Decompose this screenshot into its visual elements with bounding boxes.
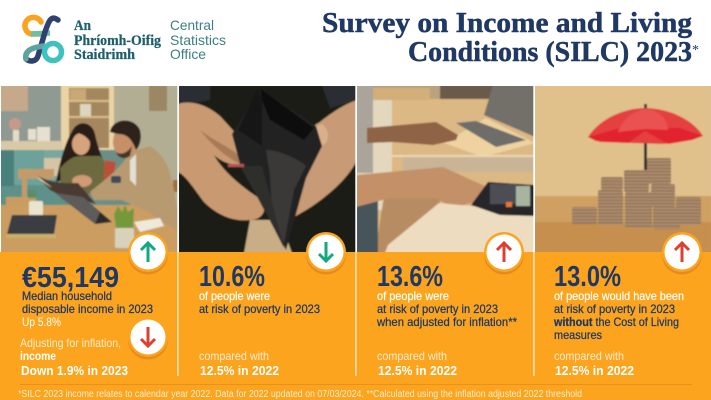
title: * xyxy=(692,43,699,58)
photo: empty wallet in hands xyxy=(178,85,357,253)
text: of people would have been: of people would have been xyxy=(554,289,684,303)
text: at risk of poverty: at risk of poverty in 2023 xyxy=(199,302,320,316)
panel: at risk of poverty xyxy=(199,261,320,378)
logo xyxy=(25,17,226,63)
text: at risk when adjusted xyxy=(376,302,517,329)
panel: inflation adjusted poverty xyxy=(376,261,517,378)
text: at risk when adjusted: at risk of poverty in 2023 xyxy=(377,302,498,316)
text: adjusting for inflation xyxy=(20,336,121,363)
stat: 55,149 euro: €55,149 xyxy=(22,262,119,294)
woman xyxy=(56,123,103,182)
icon: red down arrow xyxy=(128,317,168,360)
text: 12.5% in 2022: 12.5% in 2022 xyxy=(200,364,279,378)
logo English name: Statistics xyxy=(170,32,226,48)
logo English name xyxy=(170,17,226,62)
title xyxy=(322,7,699,68)
text: at risk when adjusted: when adjusted for inflation** xyxy=(376,315,517,329)
text: at risk without measures: at risk of poverty in 2023 xyxy=(554,302,675,316)
text: compared with: compared with xyxy=(377,349,447,363)
icon: red up arrow xyxy=(484,232,524,274)
text: of people were: of people were xyxy=(377,289,449,303)
stat: 13.0%: 13.0% xyxy=(554,261,621,293)
text: compared with: compared with xyxy=(199,349,269,363)
text: at risk without measures: without the Cost of Living xyxy=(553,315,679,329)
text: at risk without measures xyxy=(553,302,679,342)
text: median household income: Median household xyxy=(22,289,112,303)
text: of people were: of people were xyxy=(199,289,270,303)
logo mark xyxy=(25,17,62,61)
title: Survey on Income and Living xyxy=(322,7,692,39)
vertical dividers xyxy=(177,252,535,376)
text: adjusting for inflation: Adjusting for inflation, xyxy=(20,336,121,350)
title: Conditions (SILC) 2023 xyxy=(408,36,692,68)
text: up 5.8%: Up 5.8% xyxy=(22,315,61,329)
logo English name: Office xyxy=(170,46,206,62)
footnote: *SILC 2023 income relates to calendar year 2022. Data for 2022 updated on 07/03/2024. **Calculated using the inflation adjusted 2022 threshold xyxy=(18,389,582,400)
text: compared with: compared with xyxy=(554,349,624,363)
photo: couple at table with laptop xyxy=(0,85,179,253)
logo Irish name: Staidrimh xyxy=(74,47,135,63)
text: median household income: disposable income in 2023 xyxy=(22,302,153,316)
text: down 1.9%: Down 1.9% in 2023 xyxy=(21,364,128,378)
logo Irish name: Phríomh-Oifig xyxy=(74,33,162,49)
text: 12.5% in 2022: 12.5% in 2022 xyxy=(555,364,634,378)
logo Irish name xyxy=(74,18,162,63)
stat: 13.6%: 13.6% xyxy=(377,261,443,293)
icon: green down arrow xyxy=(306,232,346,274)
panel: without cost of living measures xyxy=(553,261,684,378)
text: median household income xyxy=(22,289,153,316)
icon: red up arrow xyxy=(662,232,702,274)
stat: 10.6%: 10.6% xyxy=(199,261,265,293)
icon: green up arrow xyxy=(128,232,168,274)
logo Irish name: An xyxy=(74,18,91,34)
text: at risk without measures: measures xyxy=(554,328,602,342)
panel: median income xyxy=(20,262,153,378)
table items xyxy=(36,175,96,204)
text: 12.5% in 2022: 12.5% in 2022 xyxy=(378,364,457,378)
text: adjusting for inflation: income xyxy=(20,349,56,363)
logo English name: Central xyxy=(170,17,214,33)
photo: red umbrella over coin stacks xyxy=(534,85,711,253)
table xyxy=(0,205,179,253)
photo: hands on calculator and laptop xyxy=(356,85,535,253)
orange band xyxy=(0,252,711,400)
man xyxy=(90,146,179,232)
